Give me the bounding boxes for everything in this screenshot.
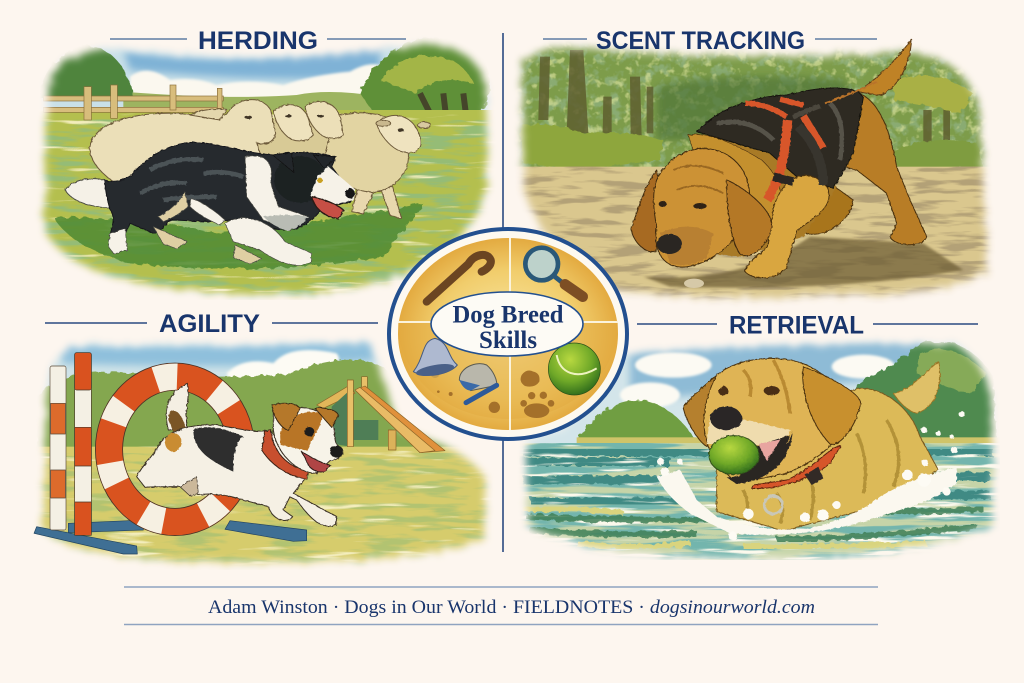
trees — [37, 360, 477, 450]
water — [510, 443, 1000, 560]
shoreline — [577, 437, 1000, 443]
eyes — [719, 386, 728, 396]
clouds — [129, 62, 380, 97]
right ear — [727, 180, 772, 256]
terrier tail — [166, 383, 188, 430]
nose — [710, 406, 742, 430]
eyes — [659, 201, 667, 207]
black saddle — [697, 88, 863, 188]
quadrant dividers — [398, 238, 618, 430]
light grass streaks — [30, 110, 500, 300]
chest — [688, 134, 781, 227]
collar — [262, 429, 309, 479]
panel: herding — [30, 20, 500, 300]
icon: magnifying glass — [525, 248, 583, 297]
tag — [764, 496, 782, 514]
fur streaks — [743, 420, 899, 523]
panel: agility — [30, 330, 500, 570]
right yellow foliage — [893, 76, 973, 113]
front pole — [75, 353, 91, 535]
water highlights — [510, 443, 1000, 560]
dog ears — [273, 153, 336, 173]
center title oval — [431, 292, 583, 356]
tree trunks — [538, 50, 950, 143]
left bushes — [520, 124, 663, 170]
dog grey ruff — [263, 215, 308, 231]
clouds — [620, 352, 895, 408]
icon: tennis ball — [548, 343, 600, 395]
green streaks — [30, 453, 500, 570]
back pole — [50, 366, 66, 530]
left bushes — [580, 400, 697, 442]
terrier body — [137, 425, 337, 526]
tree trunks — [417, 92, 468, 110]
underbody fill — [697, 133, 837, 257]
dog eye — [317, 178, 323, 183]
stones — [684, 279, 704, 288]
nose — [657, 234, 682, 254]
splash foam — [657, 467, 957, 535]
agility equipment and terrier — [34, 353, 445, 554]
tail — [893, 362, 940, 413]
panel: scent tracking — [510, 30, 1000, 310]
rear sheep legs — [352, 187, 402, 219]
sheep faces — [245, 114, 404, 132]
saddle highlights — [717, 103, 842, 160]
sheep necks — [257, 113, 350, 163]
dog muzzle — [310, 167, 355, 207]
dog tan feet — [153, 192, 262, 264]
dog mouth and tongue — [312, 197, 344, 219]
left ear — [683, 370, 723, 447]
dog fur highlights — [140, 159, 243, 200]
far hind leg — [797, 183, 853, 234]
ears — [272, 403, 338, 431]
icon: helmet with bar — [459, 364, 497, 403]
dog nose — [345, 188, 355, 198]
front leg — [745, 176, 829, 278]
heading: herding: HERDING — [198, 27, 318, 55]
light streaks — [30, 447, 500, 570]
sky — [44, 339, 382, 390]
bloodhound — [631, 39, 927, 278]
second sheep head — [273, 105, 313, 141]
meadow — [30, 110, 500, 300]
right tree — [360, 38, 490, 117]
scent tracking scenery — [510, 30, 1000, 310]
sky — [44, 43, 492, 110]
dog head — [274, 156, 326, 203]
heading: scent tracking: SCENT TRACKING — [596, 27, 805, 55]
left tree — [40, 45, 133, 98]
medallion gold disc — [398, 238, 618, 430]
dog body — [105, 142, 355, 235]
right tree highlights — [917, 350, 987, 393]
center title: Skills — [479, 327, 537, 354]
buckle — [805, 467, 823, 485]
head — [704, 358, 843, 483]
tennis ball in mouth — [709, 436, 759, 474]
right bushes — [894, 140, 984, 167]
clouds — [226, 348, 340, 378]
sheep and border collie — [65, 100, 431, 265]
right ear — [803, 367, 861, 444]
dog ground shadow — [643, 237, 963, 288]
tan spot — [165, 433, 182, 452]
golden retriever — [657, 358, 965, 540]
forest backdrop — [514, 41, 990, 167]
forehead shading — [743, 360, 790, 413]
trail ground — [510, 167, 1000, 310]
terrier group — [137, 383, 343, 526]
blue base bars — [34, 520, 307, 554]
rump and hind leg — [843, 93, 927, 245]
deep teal bands — [520, 452, 993, 502]
lower quadrant shading — [398, 323, 618, 419]
water yellow band — [523, 509, 927, 547]
terrier hind foot — [180, 477, 198, 496]
dark grass streaks — [30, 120, 500, 300]
muzzle shade — [660, 227, 713, 265]
sky — [510, 333, 1000, 443]
right sheep — [323, 113, 408, 192]
icon: paw prints — [437, 371, 554, 418]
herding scenery — [30, 20, 500, 300]
water green band — [527, 508, 983, 540]
sky blue patches — [123, 40, 380, 79]
open mouth — [727, 432, 793, 484]
terrier head — [273, 407, 342, 473]
center title: Dog Breed — [452, 302, 564, 328]
dark undergrowth — [657, 76, 887, 140]
a-frame ramp — [317, 377, 445, 453]
icon: shepherd crook — [427, 255, 491, 302]
tongue — [758, 439, 781, 461]
big left sheep — [90, 100, 276, 193]
heading: retrieval: RETRIEVAL — [729, 312, 864, 340]
sheep group — [90, 100, 431, 219]
water teal — [510, 443, 1000, 560]
harness — [745, 82, 877, 200]
agility scenery — [30, 330, 500, 570]
fence — [43, 85, 223, 120]
trail shadows — [521, 166, 990, 300]
mouth — [302, 452, 330, 472]
splash droplets — [657, 411, 965, 540]
footer credits: Adam Winston · Dogs in Our World · FIELDNOTES · dogsinourworld.com — [208, 597, 815, 618]
distant hedge — [123, 92, 372, 110]
medallion ring — [389, 229, 627, 439]
tree highlights — [380, 55, 473, 93]
vertical divider — [502, 33, 504, 552]
forehead wrinkles — [673, 166, 723, 193]
face marking — [280, 412, 323, 451]
collar — [752, 446, 841, 489]
retrieval scenery — [510, 333, 1000, 560]
dark foliage texture — [519, 44, 986, 167]
panel: retrieval — [510, 333, 1000, 560]
sky blue wash — [57, 337, 377, 366]
central medallion — [389, 229, 627, 439]
head — [654, 149, 750, 267]
agility hoop — [109, 377, 241, 522]
black patch — [193, 427, 243, 472]
muzzle — [707, 416, 791, 445]
icon: bell — [413, 338, 457, 378]
right sheep head — [377, 115, 421, 153]
nose and eye — [304, 427, 343, 458]
right trees — [857, 341, 997, 442]
third sheep head — [305, 101, 343, 139]
dog white markings — [108, 156, 312, 265]
sky blue wash — [630, 340, 923, 400]
dog tail — [65, 179, 110, 208]
grass shadow under dog — [53, 203, 423, 269]
heading: agility: AGILITY — [159, 310, 260, 338]
tail base marking — [168, 411, 187, 432]
meadow — [30, 447, 500, 570]
body — [717, 388, 938, 531]
tail — [857, 39, 912, 95]
left ear — [631, 170, 660, 252]
foliage texture — [518, 44, 984, 167]
medallion icons — [413, 248, 600, 418]
